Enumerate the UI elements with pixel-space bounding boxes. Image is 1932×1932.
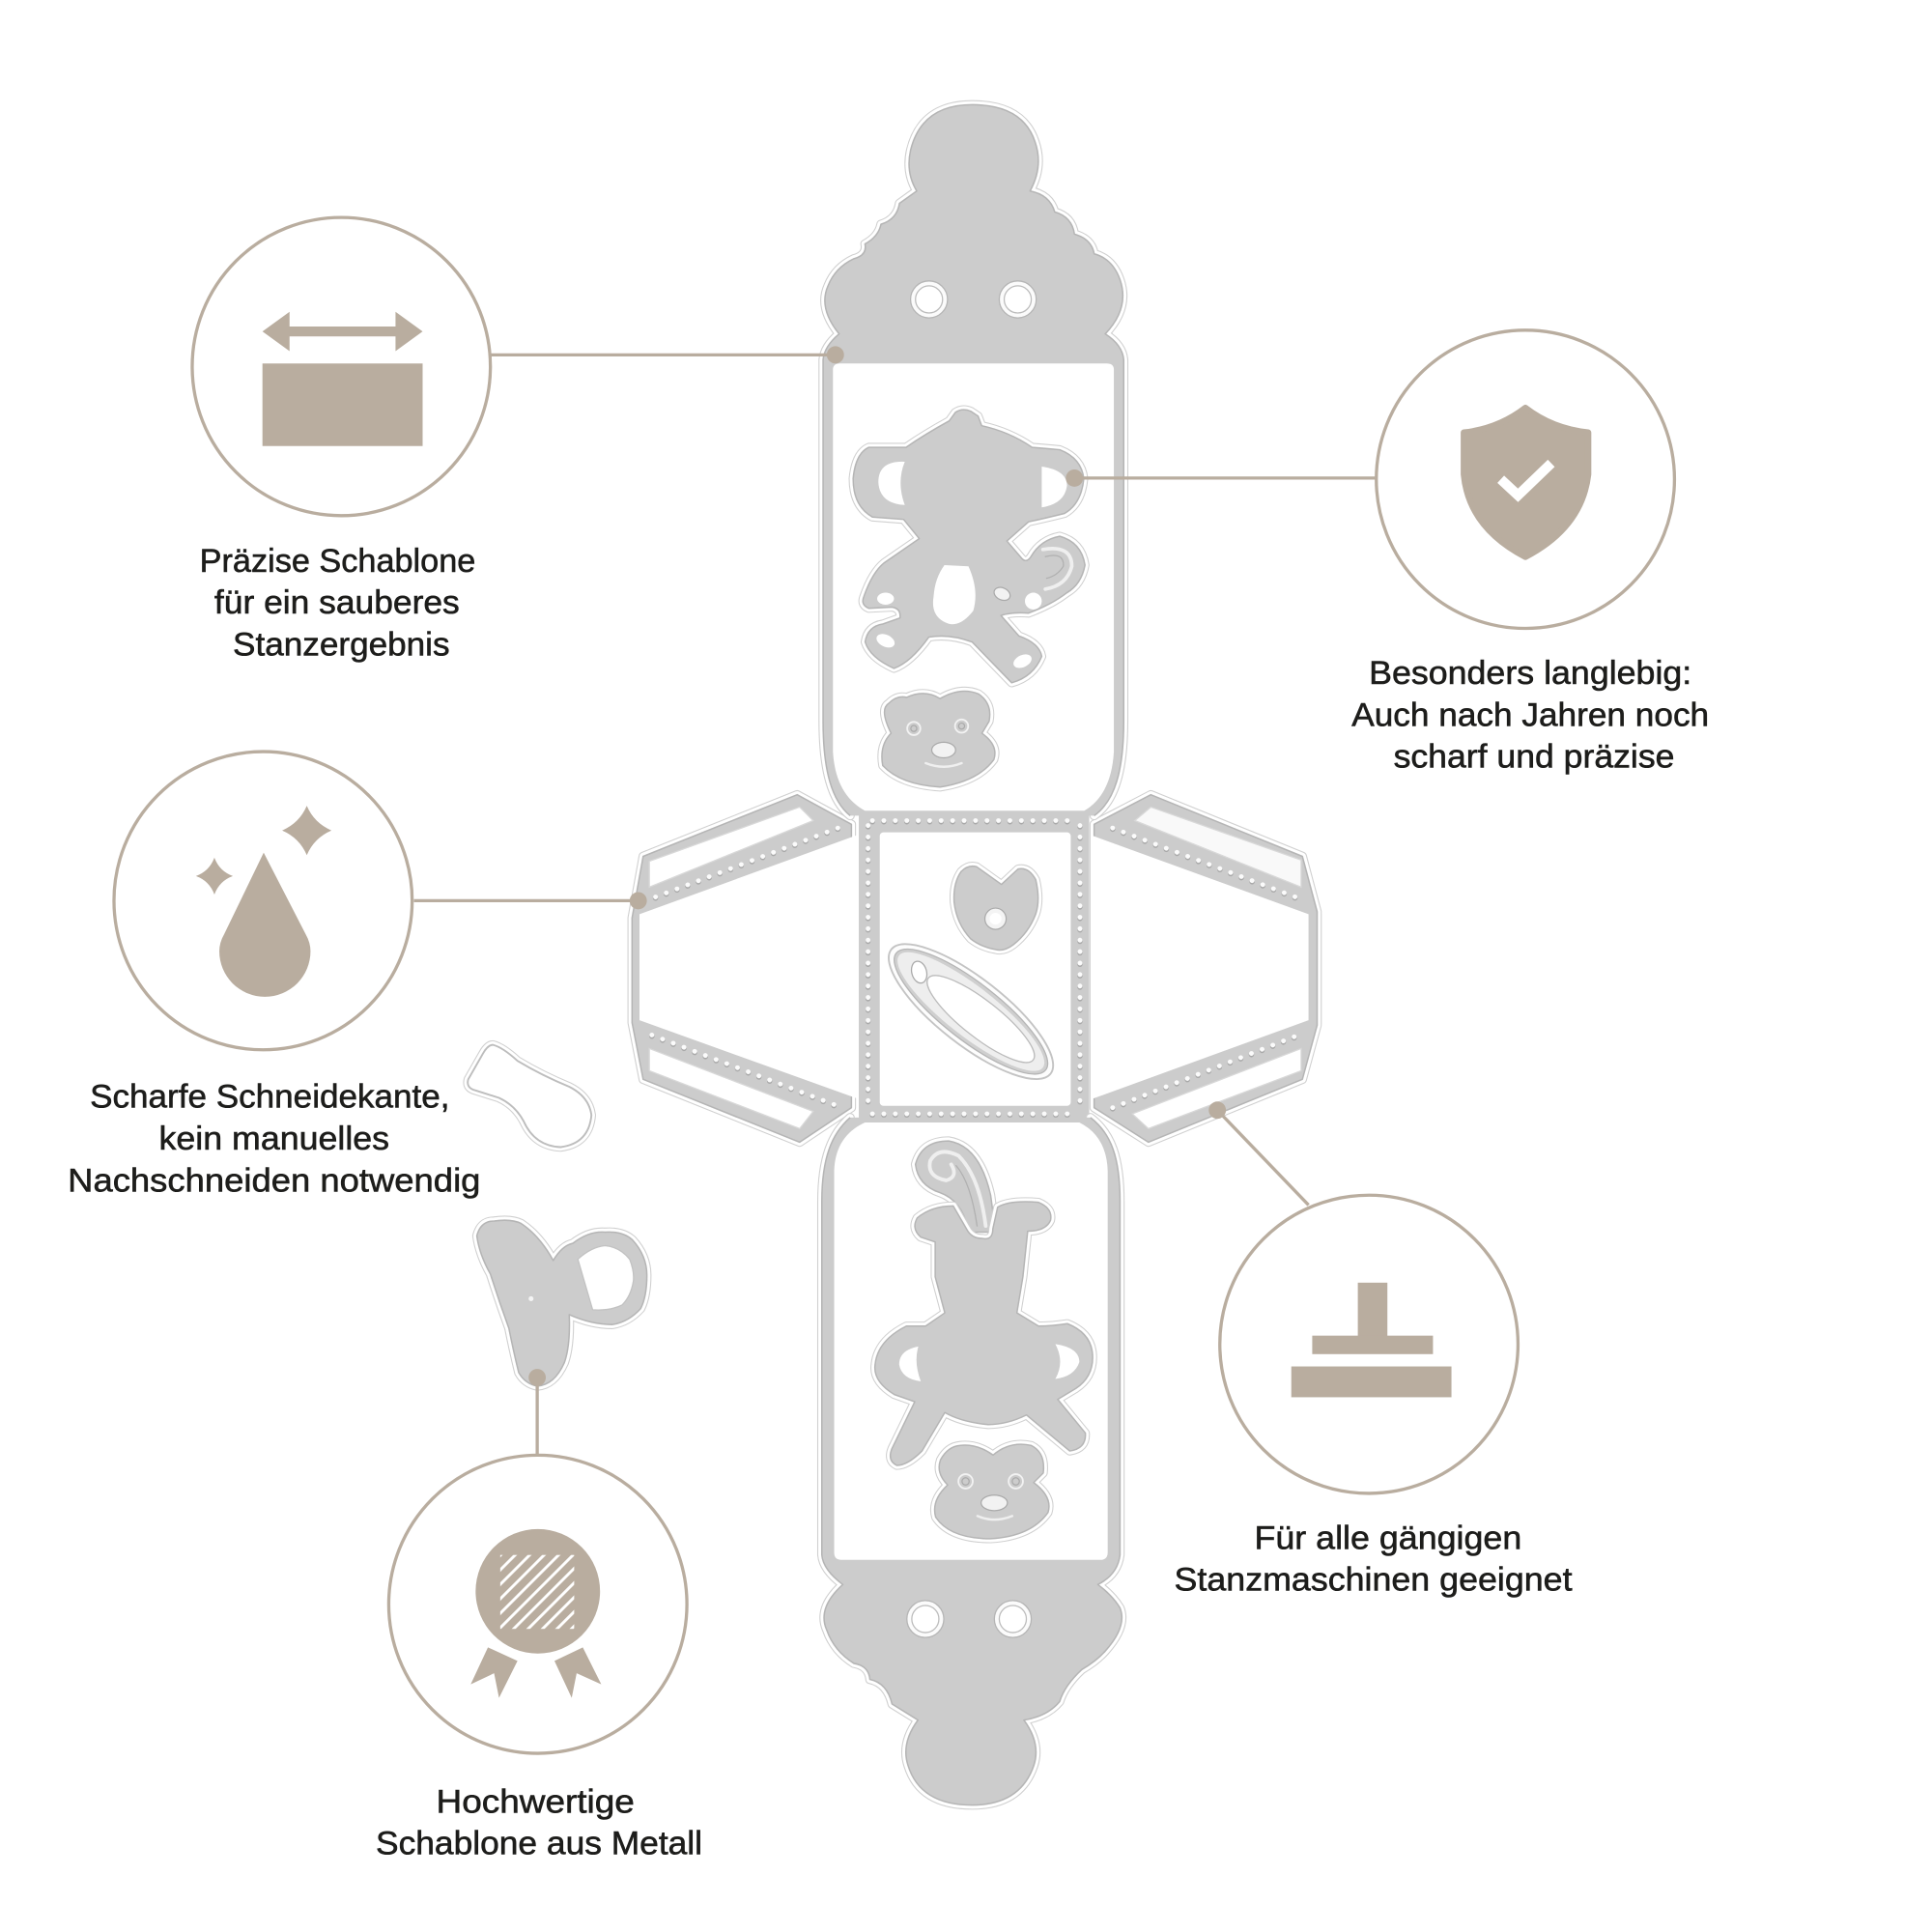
feature circle: metal — [388, 1455, 687, 1753]
connector line: precise stencil — [491, 346, 844, 363]
text: durable — [1351, 655, 1709, 776]
monkey head bottom — [935, 1444, 1049, 1539]
text: sharp edge: Scharfe Schneidekante, — [90, 1079, 450, 1116]
text: durable: scharf und präzise — [1394, 739, 1674, 776]
connector line: metal — [528, 1369, 546, 1455]
safety pin — [870, 923, 1071, 1100]
text: precise stencil: Stanzergebnis — [233, 627, 450, 664]
text: machines — [1175, 1520, 1573, 1599]
text: metal: Schablone aus Metall — [376, 1826, 702, 1862]
left wing panel — [632, 795, 859, 1142]
feature circle: precise stencil — [192, 217, 491, 516]
icon: width arrow over rectangle — [263, 312, 423, 446]
loose hanger piece — [477, 1220, 647, 1386]
feature circle: machines — [1220, 1195, 1518, 1493]
text: precise stencil: für ein sauberes — [214, 584, 460, 621]
monkey head top — [882, 691, 995, 787]
text: machines: Stanzmaschinen geeignet — [1175, 1562, 1573, 1599]
text: sharp edge: kein manuelles — [159, 1121, 389, 1157]
monkey body top — [853, 410, 1085, 683]
feature circle: sharp edge — [114, 752, 412, 1050]
text: sharp edge: Nachschneiden notwendig — [68, 1162, 480, 1199]
feature circle: durable — [1377, 330, 1674, 629]
text: precise stencil — [200, 543, 475, 664]
text: metal — [376, 1783, 702, 1862]
text: durable: Auch nach Jahren noch — [1351, 696, 1709, 733]
text: precise stencil: Präzise Schablone — [200, 543, 475, 580]
center panel with stitching — [859, 810, 1090, 1123]
connector line: durable — [1065, 469, 1377, 487]
text: metal: Hochwertige — [437, 1783, 635, 1820]
monkey body bottom — [875, 1202, 1093, 1465]
loose outline piece — [468, 1045, 591, 1148]
connector line: machines — [1208, 1101, 1309, 1205]
text: machines: Für alle gängigen — [1254, 1520, 1521, 1556]
icon: press — [1292, 1283, 1452, 1397]
tulip ornament — [954, 867, 1038, 951]
bottom bottle-shaped cap with window — [822, 1118, 1122, 1805]
text: sharp edge — [68, 1079, 480, 1199]
text: durable: Besonders langlebig: — [1369, 655, 1691, 692]
top bottle-shaped cap with window — [823, 104, 1123, 815]
die-cut metal stencil: box net — [468, 104, 1318, 1805]
icon: medal — [470, 1529, 601, 1698]
monkey tail bottom — [916, 1141, 996, 1233]
right wing panel — [1092, 795, 1318, 1142]
icon: shield with check — [1463, 408, 1588, 557]
icon: drop with sparkles — [196, 806, 331, 997]
connector line: sharp edge — [414, 892, 647, 909]
